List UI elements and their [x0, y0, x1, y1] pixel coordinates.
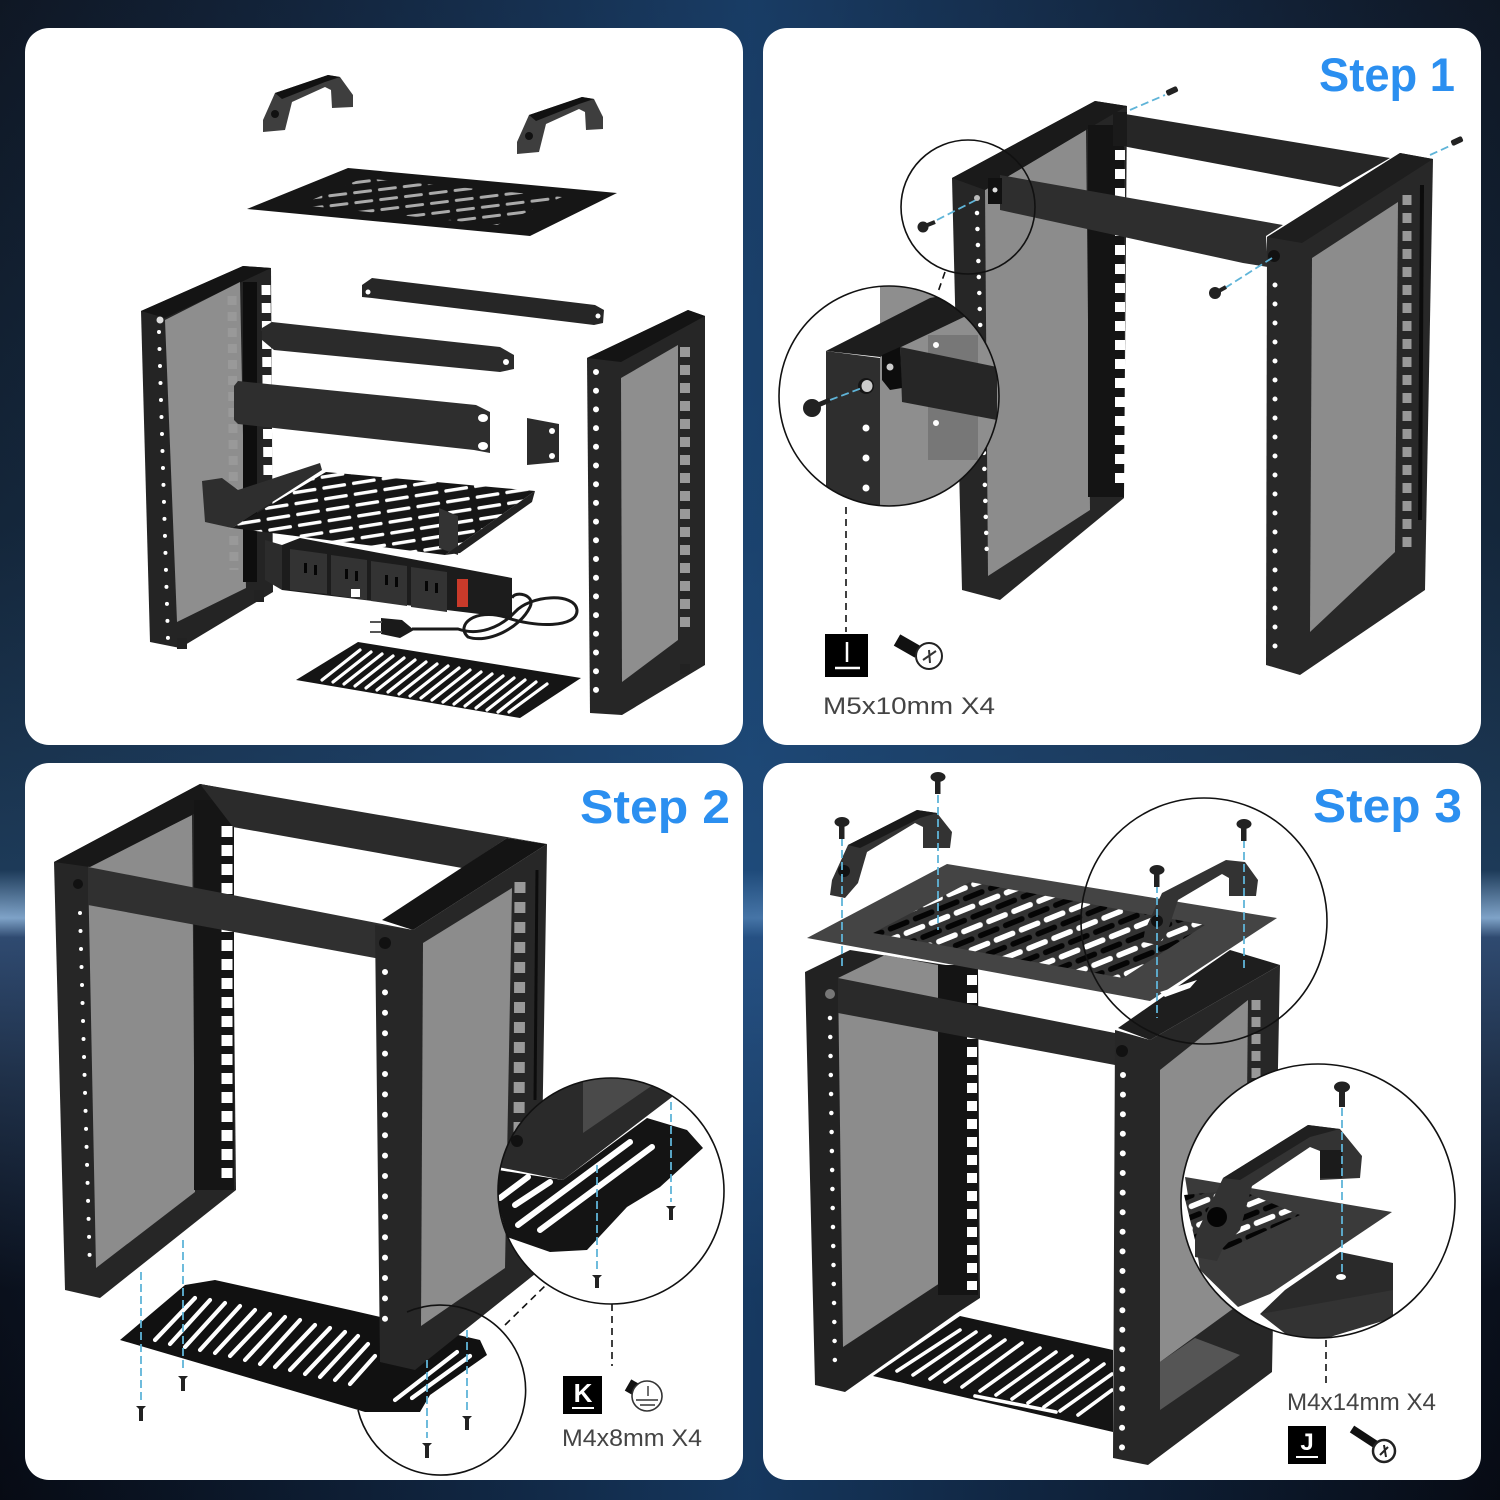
- bottom vented plate: [296, 642, 581, 718]
- right side frame: [587, 310, 705, 715]
- icon: screws left: [136, 1240, 188, 1421]
- icon: screw code J: J: [1300, 1429, 1314, 1456]
- power strip: [265, 538, 512, 618]
- leader: [845, 507, 847, 632]
- icon: screws step 1 top: [1130, 86, 1464, 299]
- callout: top handle: [1081, 798, 1327, 1044]
- vented shelf: [202, 463, 535, 555]
- vented base plate step 3: [873, 1316, 1113, 1432]
- heading: step 2: Step 2: [580, 780, 730, 833]
- icon: screw code I: [825, 634, 868, 677]
- icon: screw code K: K: [574, 1378, 593, 1408]
- vented base plate step 2: [120, 1280, 487, 1412]
- callout: enlarged base: [498, 1060, 724, 1304]
- icon: right handle: [517, 97, 603, 154]
- callout: small base corner: [358, 1285, 546, 1475]
- handle left step 3: [830, 810, 952, 898]
- label: M5x10mm: M5x10mm X4: [823, 693, 995, 720]
- icon: screws left step 3: [834, 772, 946, 968]
- icon: pan head screw: [628, 1381, 662, 1411]
- rack panel bar 2: [262, 322, 514, 372]
- icon: countersunk screw: [897, 640, 942, 669]
- top vented plate: [247, 168, 617, 236]
- heading: step 3: Step 3: [1313, 779, 1462, 832]
- leader: [611, 1304, 613, 1366]
- panel: step 2: [25, 763, 743, 1480]
- rack panel bar 3: [234, 381, 490, 453]
- rack panel bar 1: [362, 278, 604, 325]
- panel: exploded parts: [25, 28, 743, 745]
- rack frame step 2: [54, 784, 547, 1370]
- icon: flange screw: [1352, 1429, 1395, 1462]
- label: M4x8mm: M4x8mm X4: [562, 1425, 702, 1452]
- panel: step 1: [763, 28, 1481, 745]
- panel: step 3: [763, 763, 1481, 1480]
- top vented plate step 3: [807, 864, 1277, 1001]
- left side frame: [141, 266, 273, 649]
- rack frame step 1: [952, 101, 1433, 675]
- rack frame step 3: [805, 950, 1280, 1465]
- heading: step 1: Step 1: [1319, 48, 1455, 101]
- leader: [1325, 1340, 1327, 1385]
- power cable and plug: [370, 594, 577, 639]
- label: M4x14mm: M4x14mm X4: [1287, 1389, 1436, 1416]
- callout: small circle: [901, 140, 1035, 274]
- icon: screw code J: [1288, 1426, 1326, 1464]
- callout: enlarged handle: [1181, 1064, 1455, 1340]
- small bracket: [527, 418, 559, 465]
- leader: [938, 272, 945, 292]
- callout: enlarged bracket: [779, 285, 1005, 510]
- icon: left handle: [263, 75, 353, 132]
- icon: screw code K: [563, 1376, 602, 1414]
